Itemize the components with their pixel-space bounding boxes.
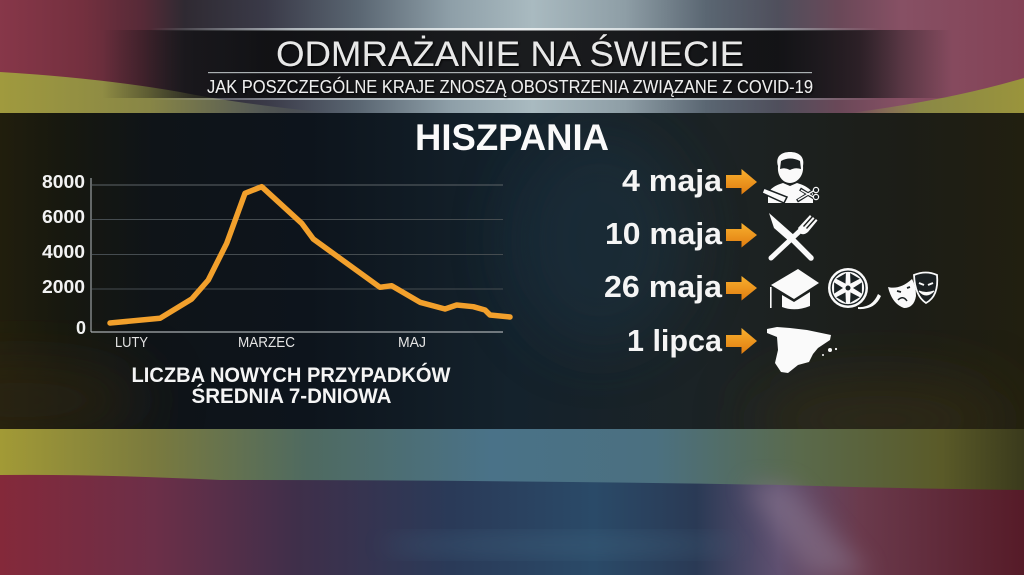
data line [110, 187, 510, 323]
date: 1 lipca [627, 323, 723, 358]
subtitle rule [208, 72, 812, 73]
timeline row: 4 maja [622, 152, 819, 203]
title: ODMRAŻANIE NA ŚWIECIE [276, 34, 744, 74]
y axis labels [42, 172, 86, 338]
timeline row: 26 maja [604, 268, 937, 309]
country heading: HISZPANIA [415, 117, 609, 158]
icon: barber [762, 152, 819, 203]
chart caption: LICZBA NOWYCH PRZYPADKÓW [132, 363, 451, 387]
subtitle: JAK POSZCZEGÓLNE KRAJE ZNOSZĄ OBOSTRZENIA ZWIĄZANE Z COVID-19 [207, 76, 813, 97]
icon: theatre masks [888, 272, 937, 308]
arrow [726, 223, 757, 248]
x axis labels: MAJ [398, 334, 426, 351]
icon: film reel [828, 268, 881, 309]
x axis labels: MARZEC [238, 334, 295, 351]
y axis labels: 4000 [42, 242, 85, 262]
date: 10 maja [605, 216, 723, 251]
x axis labels [115, 334, 426, 351]
main panel [0, 113, 1024, 429]
timeline row: 10 maja [605, 213, 818, 258]
arrow [726, 328, 757, 354]
header band [100, 28, 960, 100]
date: 26 maja [604, 269, 723, 304]
arrow [726, 276, 757, 300]
y axis labels: 8000 [42, 172, 85, 192]
icon: knife and fork [769, 213, 818, 258]
chart caption: ŚREDNIA 7-DNIOWA [192, 384, 392, 408]
line chart [42, 172, 510, 351]
date: 4 maja [622, 163, 723, 198]
arrow [726, 169, 757, 194]
chart caption [132, 363, 451, 408]
chart grid and axes [91, 178, 503, 332]
icon: graduation cap [770, 269, 819, 309]
x axis labels: LUTY [115, 334, 148, 351]
timeline row: 1 lipca [627, 323, 837, 373]
y axis labels: 2000 [42, 277, 85, 297]
y axis labels: 6000 [42, 207, 85, 227]
icon: map of Spain [767, 327, 837, 373]
y axis labels: 0 [76, 318, 86, 338]
